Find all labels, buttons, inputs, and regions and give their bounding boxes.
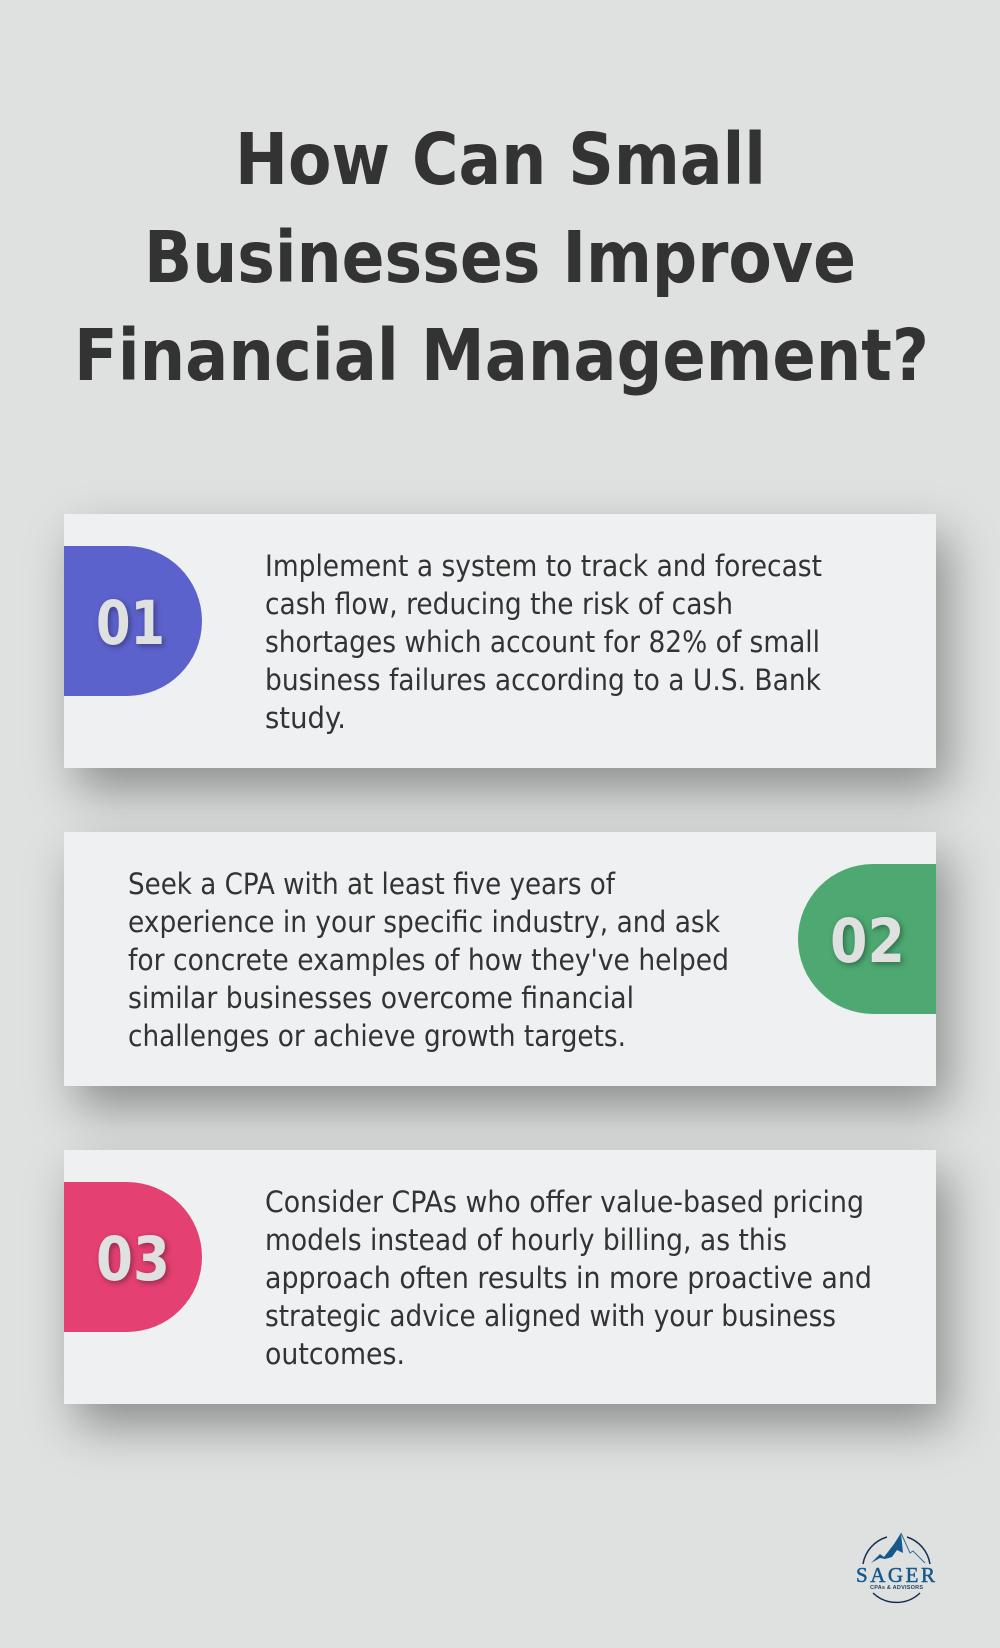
text: step 02 body [128, 867, 729, 1053]
text: step 03 body: Consider CPAs who offer value-based pricing [265, 1185, 864, 1219]
text: step 03 body: outcomes. [265, 1337, 405, 1371]
badge: 02: 02 [830, 906, 905, 977]
text: step 03 body: strategic advice aligned with your business [265, 1299, 836, 1333]
badge: 03: 03 [96, 1224, 170, 1295]
text: step 02 body: similar businesses overcome financial [128, 981, 634, 1015]
text: step 03 body: approach often results in more proactive and [265, 1261, 872, 1295]
text: step 02 body: Seek a CPA with at least five years of [128, 867, 616, 901]
badge: 02 [798, 864, 936, 1014]
badge: 01 [64, 546, 202, 696]
logo: Sager CPAs & Advisors [856, 1532, 936, 1604]
text: step 01 body [265, 549, 822, 735]
badge: 01: 01 [96, 588, 165, 659]
text: step 02 body: experience in your specific industry, and ask [128, 905, 720, 939]
panel: step 01 [64, 514, 936, 768]
text: step 03 body [265, 1185, 872, 1371]
icon: mountain [871, 1533, 925, 1563]
text: step 02 body: challenges or achieve growth targets. [128, 1019, 626, 1053]
panel: step 02 [64, 832, 936, 1086]
logo: Sager CPAs & Advisors: SAGER [856, 1563, 935, 1587]
title [74, 118, 929, 397]
text: step 01 body: shortages which account for 82% of small [265, 625, 820, 659]
title: How Can Small [235, 118, 766, 201]
logo: Sager CPAs & Advisors: CPAs & ADVISORS [870, 1585, 923, 1591]
text: step 02 body: for concrete examples of how they've helped [128, 943, 729, 977]
text: step 01 body: cash flow, reducing the risk of cash [265, 587, 733, 621]
title: Businesses Improve [144, 216, 856, 299]
text: step 01 body: Implement a system to track and forecast [265, 549, 822, 583]
text: step 03 body: models instead of hourly billing, as this [265, 1223, 787, 1257]
text: step 01 body: study. [265, 701, 346, 735]
text: step 01 body: business failures according to a U.S. Bank [265, 663, 821, 697]
badge: 03 [64, 1182, 202, 1332]
panel: step 03 [64, 1150, 936, 1404]
